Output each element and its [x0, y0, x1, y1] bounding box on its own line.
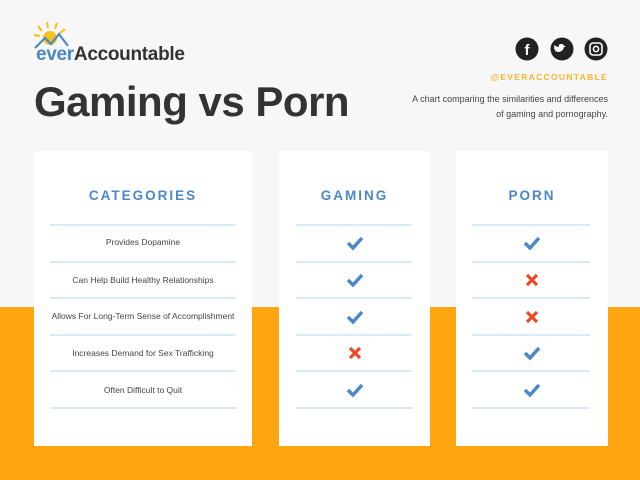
logo: everAccountable: [36, 44, 185, 65]
panel: porn: [456, 151, 608, 446]
panel: porn: PORN: [508, 188, 556, 203]
orange band: [0, 307, 640, 480]
social icons: [516, 38, 608, 60]
title: Gaming vs Porn: [34, 78, 349, 125]
panel: categories: Provides Dopamine: [106, 237, 180, 247]
panel: categories: Increases Demand for Sex Trafficking: [72, 348, 214, 358]
social icons: f: [524, 42, 530, 59]
panel: gaming: GAMING: [321, 188, 388, 203]
panel: categories: Can Help Build Healthy Relationships: [72, 275, 214, 285]
panel: categories: [34, 151, 252, 446]
description: [412, 94, 608, 119]
description: A chart comparing the similarities and differences: [412, 94, 608, 104]
description: of gaming and pornography.: [496, 109, 608, 119]
panel: categories: Allows For Long-Term Sense of Accomplishment: [52, 311, 234, 321]
panel: categories: Often Difficult to Quit: [104, 385, 182, 395]
panel: gaming: [279, 151, 430, 446]
logo: [34, 22, 185, 65]
panel: categories: CATEGORIES: [89, 188, 197, 203]
handle: @EVERACCOUNTABLE: [491, 72, 608, 82]
